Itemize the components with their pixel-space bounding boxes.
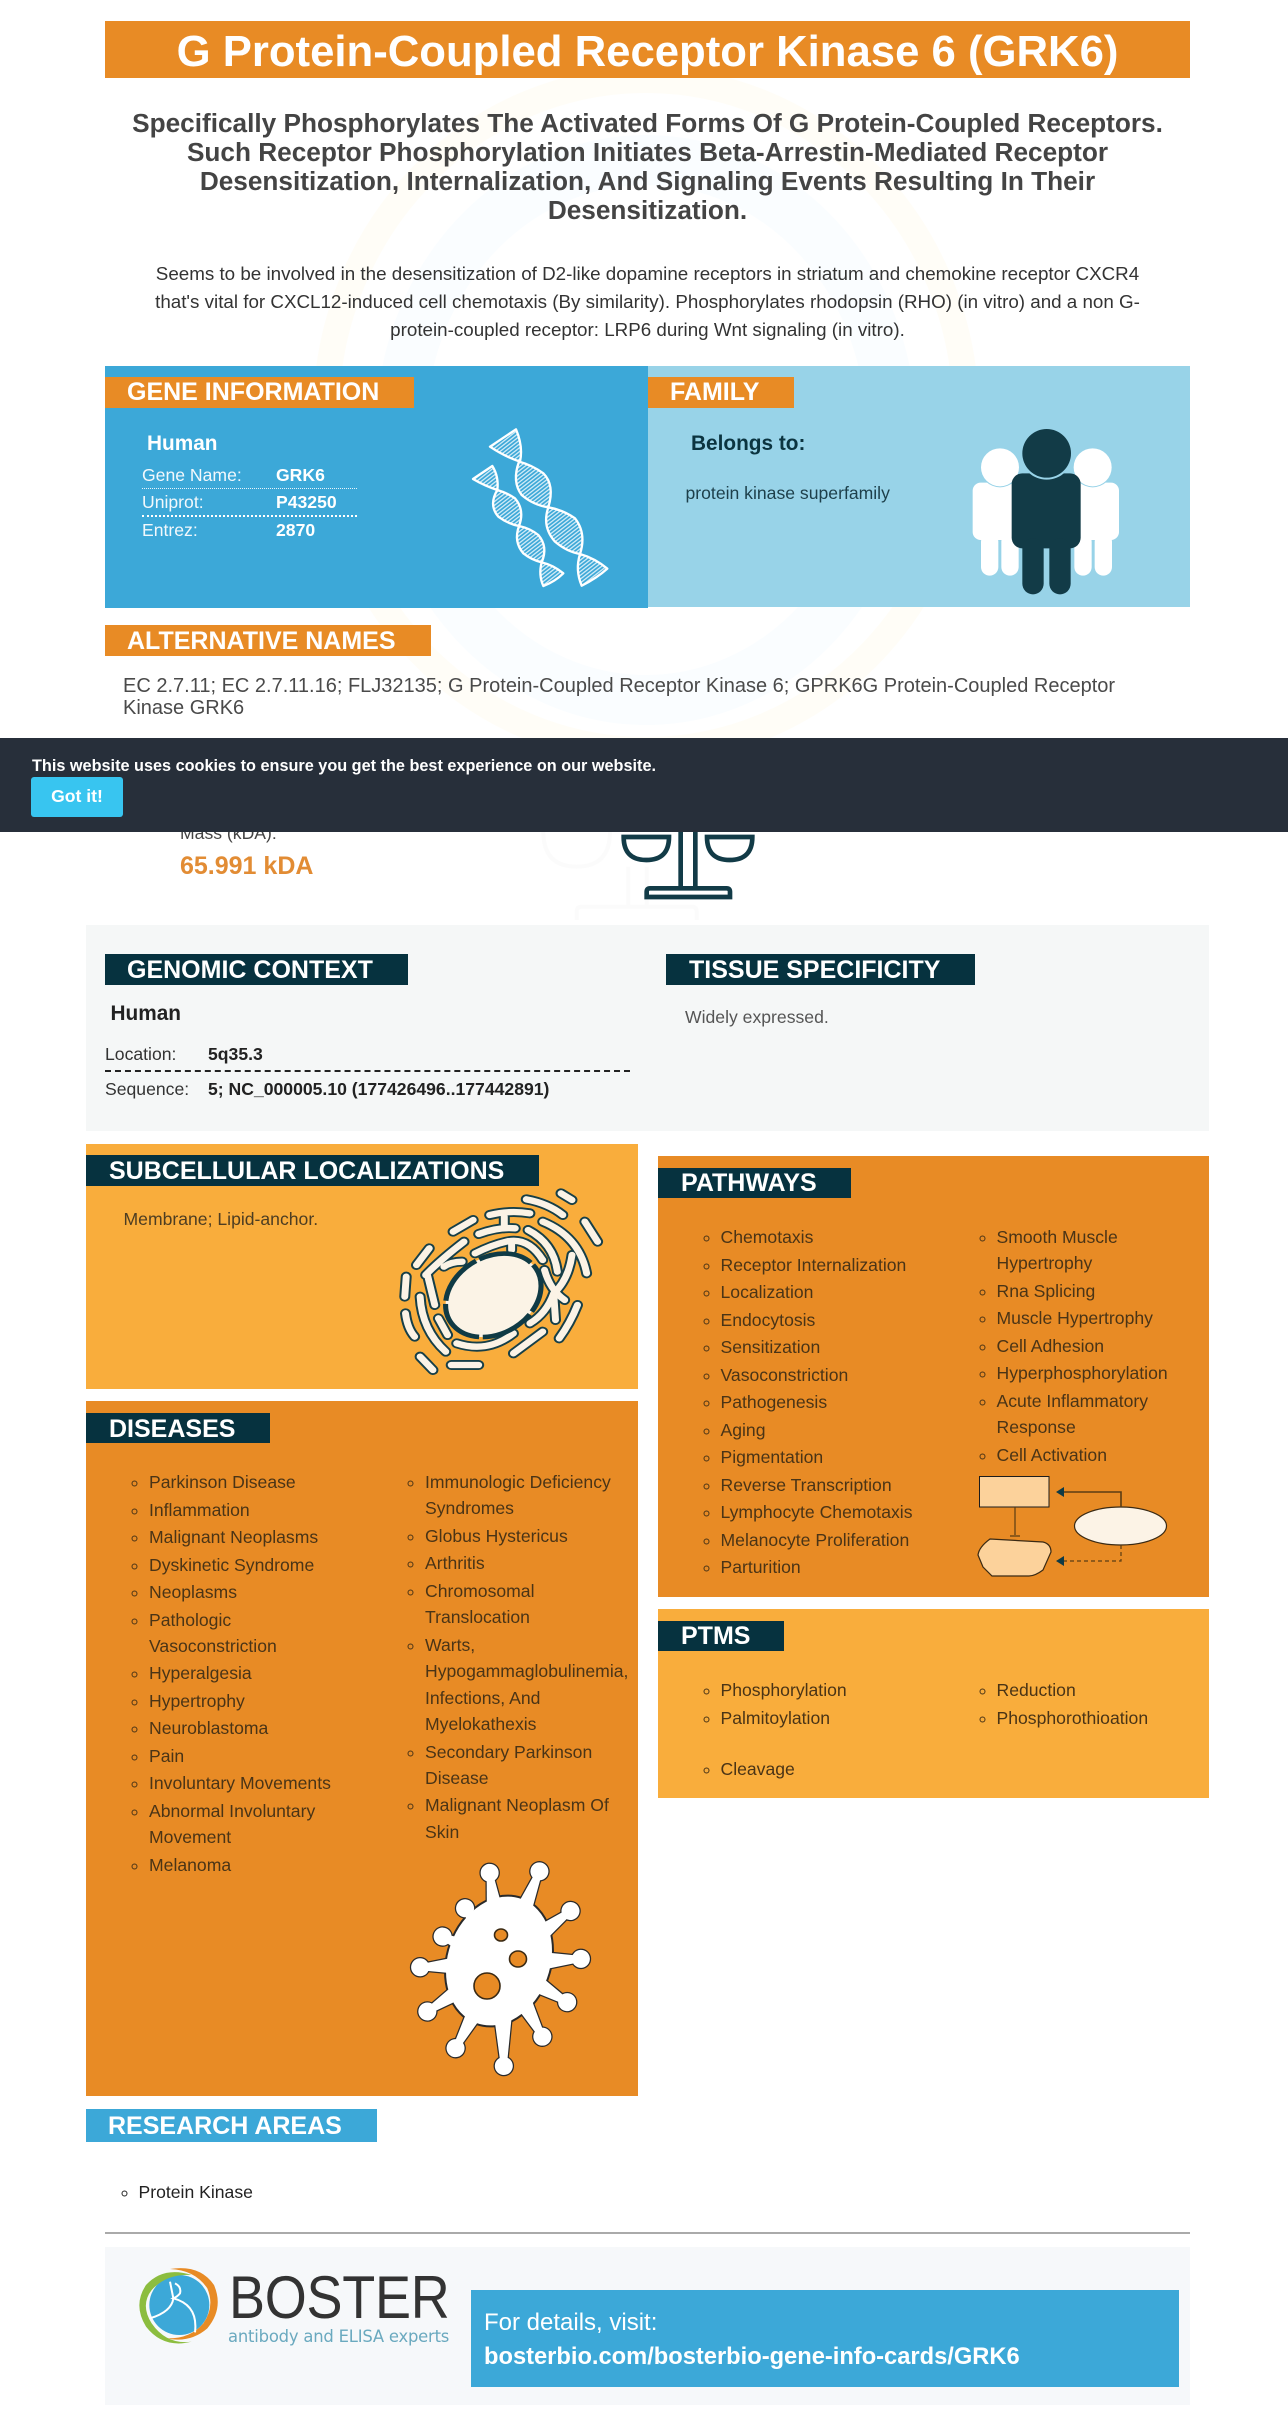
summary heading: Desensitization. xyxy=(548,195,747,225)
title banner: G Protein-Coupled Receptor Kinase 6 (GRK6) xyxy=(177,27,1118,76)
pathway list: column 1: Sensitization xyxy=(720,1337,820,1357)
alternative names text xyxy=(123,675,1115,719)
heading: gene information: GENE INFORMATION xyxy=(127,378,379,406)
location row: Location: xyxy=(105,1044,176,1064)
gene name row xyxy=(142,463,357,489)
icon: pathway diagram xyxy=(977,1476,1168,1577)
disease list: column 1: Abnormal Involuntary xyxy=(149,1801,315,1821)
gene name row: Gene Name: xyxy=(142,465,242,485)
heading: diseases xyxy=(86,1413,270,1443)
ptm list: column 1 xyxy=(704,1680,847,1779)
pathway list: column 2: Acute Inflammatory xyxy=(996,1391,1148,1411)
disease list: column 1: Inflammation xyxy=(149,1500,250,1520)
heading: family xyxy=(648,377,794,408)
heading: pathways: PATHWAYS xyxy=(681,1169,817,1197)
alternative names text: EC 2.7.11; EC 2.7.11.16; FLJ32135; G Protein-Coupled Receptor Kinase 6; GPRK6G Protein-Coupled Receptor xyxy=(123,675,1115,697)
ptm list: column 2 xyxy=(980,1680,1148,1728)
logo mark xyxy=(139,2268,218,2344)
disease list: column 2: Syndromes xyxy=(425,1498,514,1518)
uniprot row: P43250 xyxy=(276,492,337,512)
panel: pathways xyxy=(658,1156,1209,1597)
summary heading xyxy=(132,108,1163,225)
pathway list: column 1: Reverse Transcription xyxy=(720,1474,892,1494)
pathway list: column 1: Chemotaxis xyxy=(720,1227,813,1247)
disease list: column 1: Pathologic xyxy=(149,1610,231,1630)
disease list: column 2: Warts, xyxy=(425,1635,475,1655)
visit url: bosterbio.com/bosterbio-gene-info-cards/GRK6 xyxy=(484,2344,1020,2370)
entrez row xyxy=(142,520,315,540)
disease list: column 1: Malignant Neoplasms xyxy=(149,1527,318,1547)
heading: research areas: RESEARCH AREAS xyxy=(108,2112,342,2140)
sequence row: Sequence: xyxy=(105,1079,189,1099)
button: got it: Got it! xyxy=(51,786,103,806)
ptm list: column 1: Palmitoylation xyxy=(720,1708,830,1728)
summary heading: Specifically Phosphorylates The Activated Forms Of G Protein-Coupled Receptors. xyxy=(132,108,1163,138)
pathway list: column 1: Lymphocyte Chemotaxis xyxy=(720,1502,912,1522)
disease list: column 2: Globus Hystericus xyxy=(425,1526,568,1546)
uniprot row xyxy=(142,490,357,517)
sequence row: 5; NC_000005.10 (177426496..177442891) xyxy=(208,1079,549,1099)
summary paragraph: Seems to be involved in the desensitization of D2-like dopamine receptors in striatum and chemokine receptor CXCR4 xyxy=(156,263,1139,284)
heading: genomic context: GENOMIC CONTEXT xyxy=(127,956,373,984)
ptm list: column 2: Phosphorothioation xyxy=(996,1708,1148,1728)
disease list: column 2: Hypogammaglobulinemia, xyxy=(425,1661,628,1681)
disease list: column 1: Melanoma xyxy=(149,1855,231,1875)
pathway list: column 2: Hypertrophy xyxy=(996,1253,1092,1273)
pathway list: column 1: Vasoconstriction xyxy=(720,1364,848,1384)
disease list: column 1: Neoplasms xyxy=(149,1582,237,1602)
disease list: column 1: Dyskinetic Syndrome xyxy=(149,1554,314,1574)
disease list: column 1: Hypertrophy xyxy=(149,1691,245,1711)
summary paragraph: that's vital for CXCL12-induced cell chemotaxis (By similarity). Phosphorylates rhodopsin (RHO) (in vitro) and a non G- xyxy=(155,291,1140,312)
panel: footer xyxy=(105,2247,1190,2405)
pathway list: column 1: Receptor Internalization xyxy=(720,1254,906,1274)
ptm list: column 1: Phosphorylation xyxy=(720,1680,847,1700)
disease list: column 1: Vasoconstriction xyxy=(149,1636,277,1656)
disease list: column 1: Parkinson Disease xyxy=(149,1472,296,1492)
cookie banner xyxy=(0,738,1288,832)
pathway list: column 2: Response xyxy=(996,1417,1076,1437)
location row: 5q35.3 xyxy=(208,1044,263,1064)
pathway list: column 1: Aging xyxy=(720,1420,766,1440)
summary heading: Desensitization, Internalization, And Signaling Events Resulting In Their xyxy=(200,166,1095,196)
panel: diseases xyxy=(86,1401,638,2096)
research areas list: Protein Kinase xyxy=(138,2182,253,2202)
footer rule xyxy=(105,2232,1190,2234)
heading: research areas xyxy=(86,2109,377,2142)
entrez row: Entrez: xyxy=(142,520,198,540)
alternative names text: Kinase GRK6 xyxy=(123,697,244,719)
disease list: column 2: Infections, And xyxy=(425,1688,540,1708)
disease list: column 1: Neuroblastoma xyxy=(149,1718,268,1738)
icon: dna xyxy=(472,428,608,588)
summary paragraph xyxy=(155,263,1140,340)
heading: tissue specificity: TISSUE SPECIFICITY xyxy=(689,956,940,984)
pathway list: column 1 xyxy=(704,1227,912,1577)
summary paragraph: protein-coupled receptor: LRP6 during Wnt signaling (in vitro). xyxy=(390,319,905,340)
ptm list: column 2: Reduction xyxy=(996,1680,1076,1700)
localization text: Membrane; Lipid-anchor. xyxy=(124,1209,318,1229)
pathway list: column 2 xyxy=(980,1227,1168,1465)
icon: people xyxy=(972,429,1119,594)
logo: boster xyxy=(139,2264,449,2346)
pathway list: column 2: Cell Adhesion xyxy=(996,1336,1104,1356)
panel: subcellular localizations xyxy=(86,1144,638,1389)
pathway list: column 1: Pigmentation xyxy=(720,1447,823,1467)
heading: ptms xyxy=(658,1621,784,1651)
pathway list: column 2: Muscle Hypertrophy xyxy=(996,1308,1153,1328)
family value: protein kinase superfamily xyxy=(686,483,890,503)
panel: family xyxy=(648,366,1190,607)
heading: ptms: PTMS xyxy=(681,1622,750,1650)
disease list: column 2: Myelokathexis xyxy=(425,1714,536,1734)
disease list: column 1 xyxy=(132,1472,331,1875)
disease list: column 2 xyxy=(408,1472,628,1842)
pathway list: column 1: Melanocyte Proliferation xyxy=(720,1530,909,1550)
pathway list: column 2: Hyperphosphorylation xyxy=(996,1363,1168,1383)
pathway list: column 2: Cell Activation xyxy=(996,1445,1107,1465)
entrez row: 2870 xyxy=(276,520,315,540)
panel: gene information xyxy=(105,366,648,608)
heading: subcellular localizations: SUBCELLULAR LOCALIZATIONS xyxy=(109,1157,504,1185)
gene name row: GRK6 xyxy=(276,465,325,485)
button: got it xyxy=(31,777,123,817)
disease list: column 2: Chromosomal xyxy=(425,1581,535,1601)
disease list: column 2: Disease xyxy=(425,1768,489,1788)
icon: balance scale xyxy=(621,832,755,900)
icon: virus xyxy=(410,1861,592,2076)
logo wordmark: BOSTER xyxy=(229,2264,449,2331)
disease list: column 1: Pain xyxy=(149,1746,184,1766)
pathway list: column 1: Endocytosis xyxy=(720,1310,815,1330)
disease list: column 2: Immunologic Deficiency xyxy=(425,1472,611,1492)
molecular mass value: 65.991 kDA xyxy=(180,852,313,880)
heading: diseases: DISEASES xyxy=(109,1415,235,1443)
pathway list: column 2: Smooth Muscle xyxy=(996,1227,1118,1247)
uniprot row: Uniprot: xyxy=(142,492,204,512)
pathway list: column 2: Rna Splicing xyxy=(996,1281,1095,1301)
disease list: column 2: Arthritis xyxy=(425,1553,485,1573)
icon: endoplasmic reticulum xyxy=(399,1188,604,1375)
disease list: column 2: Translocation xyxy=(425,1607,530,1627)
heading: pathways xyxy=(658,1168,851,1198)
heading: family: FAMILY xyxy=(670,378,759,406)
location row xyxy=(105,1041,630,1072)
ptm list: column 1: Cleavage xyxy=(720,1759,795,1779)
molecular mass label: Mass (kDA): xyxy=(180,823,277,843)
pathway list: column 1: Pathogenesis xyxy=(720,1392,827,1412)
disease list: column 1: Movement xyxy=(149,1827,231,1847)
pathway list: column 1: Localization xyxy=(720,1282,813,1302)
cookie message: This website uses cookies to ensure you get the best experience on our website. xyxy=(32,757,656,775)
disease list: column 2: Secondary Parkinson xyxy=(425,1742,592,1762)
visit label: For details, visit: xyxy=(484,2309,657,2336)
species label: Human xyxy=(110,1002,181,1025)
background watermark logo xyxy=(300,70,1000,930)
callout: visit for details xyxy=(471,2290,1179,2387)
logo tagline: antibody and ELISA experts xyxy=(228,2327,449,2346)
disease list: column 1: Involuntary Movements xyxy=(149,1773,331,1793)
pathway list: column 1: Parturition xyxy=(720,1557,801,1577)
disease list: column 2: Malignant Neoplasm Of xyxy=(425,1795,609,1815)
disease list: column 2: Skin xyxy=(425,1822,459,1842)
panel: genomic context and tissue specificity xyxy=(86,925,1209,1131)
belongs to label: Belongs to: xyxy=(691,432,805,455)
panel: ptms xyxy=(658,1609,1209,1798)
tissue text: Widely expressed. xyxy=(685,1007,829,1027)
summary heading: Such Receptor Phosphorylation Initiates Beta-Arrestin-Mediated Receptor xyxy=(187,137,1108,167)
species label: Human xyxy=(147,432,217,455)
heading: alternative names: ALTERNATIVE NAMES xyxy=(127,627,396,655)
disease list: column 1: Hyperalgesia xyxy=(149,1663,252,1683)
